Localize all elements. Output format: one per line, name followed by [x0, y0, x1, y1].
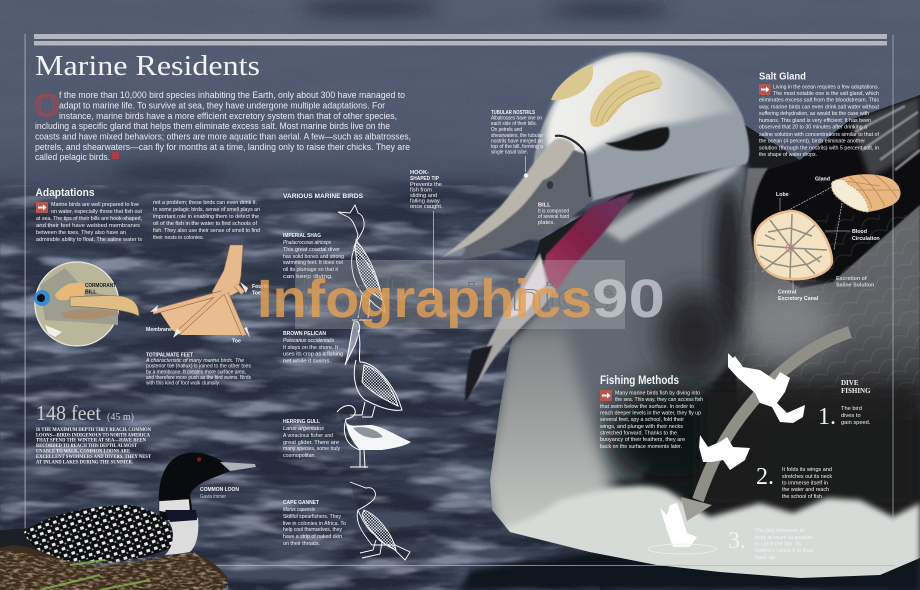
salt gland text: Living in the ocean requires a few adaptations. — [773, 84, 879, 90]
adaptations text column 2: In some pelagic birds, sense of smell plays an — [153, 207, 260, 213]
intro text block: adapt to marine life. To survive at sea, they have undergone multiple adaptations. For — [59, 100, 386, 112]
upper bill — [441, 138, 575, 258]
white lower plumage — [490, 486, 920, 590]
icon: red arrow — [36, 202, 48, 213]
step 1: The bird — [841, 406, 862, 412]
step 1 — [818, 404, 871, 430]
salt gland text: The most notable one is the salt gland, which — [773, 91, 879, 97]
black panel behind gland — [750, 95, 920, 282]
salt gland labels — [776, 176, 880, 302]
148 feet description — [36, 427, 151, 466]
illustration: brown pelican — [345, 320, 402, 417]
watermark banner: fog — [300, 269, 367, 322]
intro text block — [35, 88, 411, 163]
imperial shag text: can keep diving. — [283, 274, 334, 280]
annotation: bill: BILL — [538, 202, 551, 208]
neck — [505, 165, 748, 480]
fishing methods heading: Fishing Methods — [600, 375, 679, 387]
annotation: bill — [538, 202, 569, 226]
148 feet description: EXCELLENT SWIMMERS AND DIVERS. THEY NEST — [36, 454, 151, 460]
totipalmate feet caption: TOTIPALMATE FEET — [146, 352, 193, 358]
albatross body and neck — [460, 90, 920, 590]
salt gland text: the ocean (4 percent), birds eliminate another — [759, 139, 865, 145]
foot labels: Toe — [232, 338, 241, 344]
salt gland labels: Excretory Canal — [778, 296, 819, 302]
totipalmate feet caption — [145, 352, 251, 386]
step 2: the water and reach — [782, 487, 829, 493]
foot labels: Membrane — [146, 327, 172, 333]
neck highlight — [603, 160, 746, 242]
title: Marine Residents — [35, 51, 260, 82]
illustration: imperial shag — [338, 205, 385, 320]
fishing methods text: reach deeper levels in the water, they fly up — [600, 410, 701, 416]
salt gland overlay left — [551, 64, 593, 100]
adaptations text column 2: important role in enabling them to detect the — [153, 214, 259, 220]
imperial shag text: This great coastal diver — [283, 247, 340, 253]
adaptations text column 1: Marine birds are well prepared to live — [51, 202, 139, 208]
totipalmate feet caption: and therefore more push as the bird swims. Birds — [146, 375, 251, 381]
salt gland overlay right — [590, 70, 662, 127]
fishing methods text: stretched forward. Thanks to the — [600, 430, 677, 436]
totipalmate feet caption: by a membrane. It creates more surface area, — [146, 369, 246, 375]
watermark banner: inhics — [465, 277, 615, 319]
loon breast — [165, 518, 198, 555]
fishing methods text: that swim below the surface. In order to — [600, 404, 694, 410]
salt gland text: eliminates excess salt from the bloodstream. This — [759, 98, 879, 104]
step 3: back up. — [755, 555, 777, 561]
salt gland text — [758, 84, 879, 158]
step 3: to catch the fish. Its — [755, 542, 801, 548]
cape gannet text: CAPE GANNET — [283, 500, 319, 506]
annotation: hook-shaped tip: once caught. — [410, 204, 443, 210]
illustration: herring gull — [337, 405, 411, 468]
illustration: cape gannet — [350, 482, 410, 560]
watermark banner — [257, 260, 665, 329]
dive fishing heading: DIVE — [841, 379, 859, 387]
cape gannet text: have a strip of naked skin — [283, 534, 342, 540]
cape gannet text: Skillful spearfishers. They — [283, 514, 341, 520]
salt gland text: the shape of water drops. — [759, 152, 817, 158]
loon tail — [0, 528, 60, 560]
cape gannet text: Morus capensis — [283, 507, 315, 513]
imperial shag text: swimming feet. It does not — [283, 260, 343, 266]
salt gland heading: Salt Gland — [759, 70, 806, 82]
icon: red arrow — [600, 390, 612, 401]
annotation: hook-shaped tip: SHAPED TIP — [410, 176, 439, 182]
annotation: hook-shaped tip — [410, 170, 443, 296]
salt gland text: way, marine birds can even drink salt water without — [758, 104, 879, 110]
totipalmate feet caption: posterior toe (hallux) is joined to the other toes — [146, 364, 251, 370]
step 3: body as much as possible — [755, 535, 813, 541]
brown pelican text: Pelecanus occidentalis — [283, 338, 334, 344]
various marine birds heading: VARIOUS MARINE BIRDS — [283, 193, 363, 200]
step 1: dives to — [841, 413, 861, 419]
adaptations text column 1: at sea. The tips of their bills are hook-shaped, — [36, 216, 142, 222]
annotation: hook-shaped tip: falling away — [410, 198, 440, 204]
cape gannet text: live in colonies in Africa. To — [283, 521, 346, 527]
loon neck and head — [159, 452, 256, 520]
salt gland text: humans. This gland is very efficient: It has been — [759, 118, 871, 124]
cape gannet text: on their throats. — [283, 541, 320, 547]
label: cormorant bill: CORMORANT — [85, 283, 117, 289]
bird silhouette 1: flying — [728, 353, 805, 423]
foot labels: Toe — [252, 290, 261, 296]
adaptations text column 2: their nests in colonies. — [153, 235, 204, 241]
totipalmate feet caption: with this kind of foot walk clumsily. — [145, 380, 220, 386]
step 3: feathers cause it to float — [755, 548, 813, 554]
annotation: hook-shaped tip: Prevents the — [410, 182, 442, 188]
salt gland text: solution (through the nostrils) with 5 percent salt, in — [759, 145, 879, 151]
salt gland text: observed that 20 to 30 minutes after drinking a — [759, 125, 868, 131]
adaptations text column 2 — [153, 200, 260, 241]
fishing methods text: several feet, spy a school, fold their — [600, 417, 684, 423]
148 feet stat: (45 m) — [107, 412, 134, 423]
adaptations text column 2: oil of the fish in the water to find schools of — [153, 221, 257, 227]
dive fishing heading: FISHING — [841, 387, 871, 395]
annotation: tubular nostrils: nostrils have merged on — [491, 138, 543, 144]
watermark banner: 90 — [592, 269, 665, 329]
annotation: tubular nostrils: TUBULAR NOSTRILS — [491, 110, 535, 116]
step 3: The bird immerses its — [755, 528, 805, 534]
label: cormorant bill — [85, 283, 117, 296]
salt gland text: suffering dehydration, as would be the case with — [759, 111, 869, 117]
annotation: bill: plates. — [538, 220, 555, 226]
imperial shag text: IMPERIAL SHAG — [283, 233, 321, 239]
salt gland labels: Saline Solution — [836, 282, 874, 288]
nest — [0, 545, 228, 590]
herring gull text: HERRING GULL — [283, 419, 320, 425]
cape gannet text: help cool themselves, they — [283, 527, 342, 533]
salt gland labels: Gland — [815, 176, 830, 182]
adaptations text column 2: fish. They also use their sense of smell to find — [153, 228, 260, 234]
arrow: dive path — [681, 332, 850, 521]
common loon label: COMMON LOON — [200, 487, 239, 493]
annotation: hook-shaped tip: HOOK- — [410, 170, 429, 176]
brown pelican text: net while it swims. — [283, 358, 331, 364]
salt gland labels: Circulation — [852, 236, 880, 242]
step 2 — [756, 464, 832, 500]
fishing methods text: back on the surface moments later. — [600, 444, 682, 450]
adaptations text column 1: between the toes. They also have an — [36, 230, 126, 236]
fishing methods text: buoyancy of their feathers, they are — [600, 437, 685, 443]
intro text block: called pelagic birds. — [35, 152, 110, 163]
annotation: tubular nostrils: top of the bill, forming a — [491, 144, 544, 150]
watermark banner: Infographics — [257, 269, 592, 329]
adaptations text column 1: on water, especially those that fish out — [51, 209, 142, 215]
annotation: tubular nostrils: single nasal tube. — [491, 150, 528, 156]
foot labels — [146, 284, 268, 344]
bird silhouette 2: diving — [699, 435, 750, 470]
step 3 — [728, 528, 813, 561]
imperial shag text: has solid bones and strong — [283, 254, 344, 260]
wing feathers — [733, 168, 920, 420]
herring gull text: A voracious fisher and — [283, 433, 333, 439]
loon body — [24, 505, 176, 563]
herring gull text: cosmopolitan. — [283, 453, 316, 459]
annotation: bill: It is composed — [538, 208, 569, 214]
annotation: hook-shaped tip: sliding and — [410, 193, 437, 199]
eye — [605, 127, 669, 151]
totipalmate foot illustration — [150, 245, 250, 338]
salt gland labels: Central — [778, 290, 797, 296]
fishing methods text: wings, and plunge with their necks — [599, 424, 683, 430]
label: cormorant bill: BILL — [85, 290, 97, 296]
brown pelican text: BROWN PELICAN — [283, 331, 326, 337]
lower mandible and mouth — [465, 192, 635, 402]
icon: red arrow — [759, 84, 770, 95]
adaptations heading: Adaptations — [36, 187, 94, 199]
step 2: the school of fish — [782, 494, 822, 500]
gland cross-section — [755, 211, 832, 279]
dive fishing heading — [841, 379, 871, 395]
step 1: 1. — [818, 404, 836, 430]
herring gull text — [283, 419, 340, 459]
watermark banner: 90 — [385, 262, 445, 322]
step 3: 3. — [728, 528, 746, 554]
annotation: bill: of several hard — [538, 214, 569, 220]
intro text block: instance, marine birds have a more efficient excretory system than that of other species, — [59, 111, 397, 122]
148 feet description: UNABLE TO WALK, COMMON LOONS ARE — [36, 449, 130, 455]
adaptations text column 2: not a problem; these birds can even drink it. — [153, 200, 257, 206]
annotation: tubular nostrils: Albatrosses have one on — [491, 116, 542, 122]
whole gland — [831, 174, 901, 212]
annotation: hook-shaped tip: fish from — [410, 188, 432, 194]
148 feet stat: 148 feet — [36, 401, 101, 425]
annotation: tubular nostrils: shearwaters, the tubular — [491, 133, 543, 139]
step 1: gain speed. — [841, 420, 871, 426]
bird silhouette 3: entering water — [648, 503, 716, 554]
148 feet stat — [36, 401, 134, 425]
step 2: It folds its wings and — [782, 467, 832, 473]
step 2: stretches out its neck — [782, 474, 832, 480]
foot labels: Fourth — [252, 284, 268, 290]
148 feet description: THAT SPEND THE WINTER AT SEA—HAVE BEEN — [36, 438, 146, 444]
intro text block: including a specific gland that helps them eliminate excess salt. Most marine birds live on the — [35, 121, 390, 132]
fishing methods text: Many marine birds fish by diving into — [615, 390, 700, 396]
salt gland labels: Lobe — [776, 192, 789, 198]
cormorant bill circle diagram — [34, 262, 139, 346]
imperial shag text: oil its plumage so that it — [283, 267, 338, 273]
herring gull text: great glider. There are — [283, 440, 339, 446]
intro text block: petrels, and shearwaters—can fly for months at a time, landing only to raise their chicks. They are — [35, 142, 410, 153]
annotation: tubular nostrils — [491, 110, 544, 178]
fishing methods text — [599, 390, 703, 450]
adaptations text column 1: and their feet have webbed membranes — [36, 223, 140, 229]
148 feet description: RECORDED TO REACH THIS DEPTH. ALMOST — [36, 443, 137, 449]
herring gull text: Larus argentatus — [283, 426, 324, 432]
adaptations text column 1 — [36, 202, 142, 243]
brown pelican text: uses its crop as a fishing — [283, 352, 343, 358]
148 feet description: LOONS—BIRDS INDIGENOUS TO NORTH AMERICA — [36, 432, 150, 438]
albatross head — [441, 52, 749, 402]
salt gland diagram — [755, 174, 901, 279]
breast — [480, 330, 660, 570]
annotation: tubular nostrils: each side of their bills. — [491, 121, 537, 127]
totipalmate feet caption: A characteristic of many marine birds. The — [145, 358, 244, 364]
common loon label: Gavia immer — [200, 494, 226, 500]
common loon photo — [0, 452, 256, 563]
lower bill plate — [460, 145, 593, 260]
necklace — [159, 499, 190, 512]
brown pelican text: It stays on the shore. It — [283, 345, 338, 351]
annotation: tubular nostrils: On petrels and — [491, 127, 522, 133]
step 2: 2. — [756, 464, 774, 490]
148 feet description: IS THE MAXIMUM DEPTH THEY REACH. COMMON — [36, 427, 151, 433]
intro text block: f the more than 10,000 bird species inhabiting the Earth, only about 300 have managed to — [59, 90, 405, 101]
salt gland text: saline solution with concentrations similar to that of — [759, 132, 879, 138]
herring gull text: many species, some truly — [283, 446, 340, 452]
common loon label — [200, 487, 239, 500]
brown pelican text — [283, 331, 343, 364]
imperial shag text — [283, 233, 344, 280]
cape gannet text — [283, 500, 346, 547]
salt gland labels: Excretion of — [836, 276, 867, 282]
intro text block: coasts and have mixed behaviors; others are more aquatic than aerial. A few—such as albatrosses, — [35, 132, 411, 142]
intro text block: O — [35, 88, 59, 124]
148 feet description: AT INLAND LAKES DURING THE SUMMER. — [36, 460, 134, 466]
fishing methods text: the sea. This way, they can access fish — [615, 397, 703, 403]
imperial shag text: Phalacrocorax atriceps — [283, 240, 331, 246]
salt gland labels: Blood — [852, 229, 867, 235]
adaptations text column 1: admirable ability to float. The saline water is — [36, 237, 142, 243]
step 2: to immerse itself in — [782, 480, 828, 486]
